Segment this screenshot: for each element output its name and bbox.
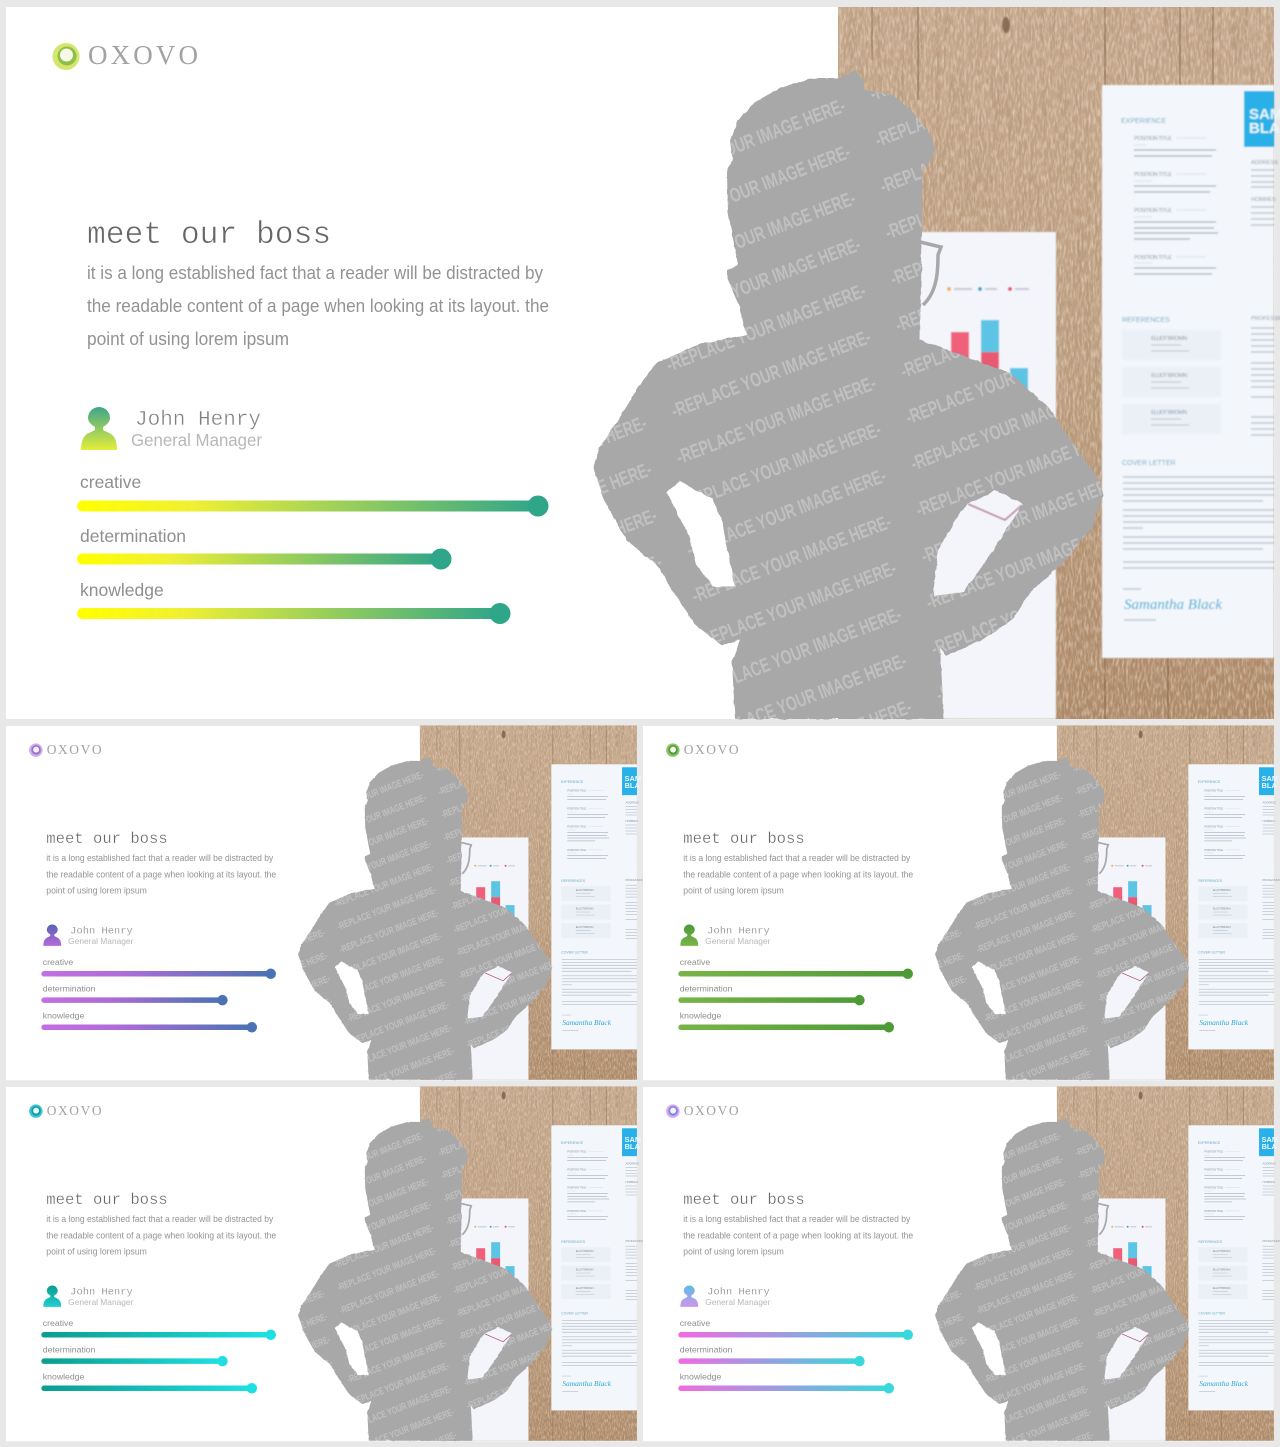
logo: OXOVO (47, 742, 102, 757)
skill bar: creative (678, 1318, 913, 1340)
name and role (705, 925, 770, 946)
text block: description: it is a long established fact that a reader will be distracted by (683, 1214, 911, 1224)
name and role: General Manager (131, 430, 262, 450)
title: meet our boss (683, 1191, 805, 1209)
text block: description: point of using lorem ipsum (87, 329, 289, 349)
icon: person (43, 925, 61, 946)
photo: wood wall, papers and silhouette (794, 725, 1280, 1153)
icon: person (81, 407, 117, 450)
panel: small slide purple-blue theme (6, 725, 647, 1153)
panel: small slide green theme (643, 725, 1280, 1153)
skill bar: determination: determination (680, 984, 733, 994)
text block: description: the readable content of a page when looking at its layout. the (46, 1230, 276, 1240)
name and role (705, 1286, 770, 1307)
name and role: John Henry (70, 925, 133, 937)
text block: description: the readable content of a page when looking at its layout. the (87, 296, 549, 316)
panel: small slide pink-cyan theme (643, 1086, 1280, 1447)
skill bar: creative: creative (680, 1318, 710, 1328)
photo: wood wall, papers and silhouette (157, 725, 647, 1153)
text block: description: the readable content of a page when looking at its layout. the (683, 869, 913, 879)
skill bar: knowledge: knowledge (680, 1011, 722, 1021)
photo: wood wall, papers and replaceable silhouette (309, 7, 1280, 866)
skill bar: knowledge: knowledge (80, 580, 164, 600)
skill bar: determination (77, 526, 452, 570)
photo: wood wall, papers and silhouette (157, 1086, 647, 1447)
name and role: John Henry (707, 1286, 770, 1298)
title: meet our boss (46, 830, 168, 848)
skill bar: determination: determination (680, 1345, 733, 1355)
skill bar: knowledge: knowledge (680, 1372, 722, 1382)
name and role (68, 925, 133, 946)
text block: description: point of using lorem ipsum (683, 1247, 784, 1257)
skill bar: determination (678, 984, 865, 1005)
text block: description: it is a long established fact that a reader will be distracted by (46, 853, 274, 863)
name and role: General Manager (705, 1297, 770, 1307)
skill bar: creative: creative (80, 472, 141, 492)
logo: OXOVO (47, 1103, 102, 1118)
skill bar: knowledge (77, 580, 510, 624)
panel: small slide teal theme (6, 1086, 647, 1447)
text block: description (683, 1214, 913, 1257)
icon: person (680, 1286, 698, 1307)
title: meet our boss (87, 218, 331, 253)
photo: wood wall, papers and silhouette (794, 1086, 1280, 1447)
text block: description: it is a long established fact that a reader will be distracted by (87, 263, 543, 283)
skill bar: creative (678, 957, 913, 979)
skill bar: determination: determination (43, 1345, 96, 1355)
skill bar: creative: creative (680, 957, 710, 967)
skill bar: creative (41, 1318, 276, 1340)
title: meet our boss (46, 1191, 168, 1209)
name and role: General Manager (68, 936, 133, 946)
skill bar: determination: determination (80, 526, 186, 546)
skill bar: creative (77, 472, 548, 516)
text block: description: point of using lorem ipsum (683, 886, 784, 896)
skill bar: creative: creative (43, 957, 73, 967)
name and role: General Manager (705, 936, 770, 946)
text block: description: it is a long established fact that a reader will be distracted by (683, 853, 911, 863)
icon: person (680, 925, 698, 946)
skill bar: creative: creative (43, 1318, 73, 1328)
logo: OXOVO (88, 40, 198, 70)
skill bar: knowledge (678, 1372, 894, 1394)
title: meet our boss (683, 830, 805, 848)
name and role (68, 1286, 133, 1307)
skill bar: determination (41, 984, 228, 1005)
name and role (131, 409, 262, 450)
name and role: John Henry (70, 1286, 133, 1298)
text block: description: point of using lorem ipsum (46, 886, 147, 896)
text block: description: it is a long established fact that a reader will be distracted by (46, 1214, 274, 1224)
text block: description (46, 1214, 276, 1257)
skill bar: knowledge: knowledge (43, 1011, 85, 1021)
name and role: General Manager (68, 1297, 133, 1307)
logo: OXOVO (684, 1103, 739, 1118)
skill bar: determination: determination (43, 984, 96, 994)
skill bar: creative (41, 957, 276, 979)
skill bar: knowledge: knowledge (43, 1372, 85, 1382)
text block: description (87, 263, 549, 349)
skill bar: knowledge (678, 1011, 894, 1033)
name and role: John Henry (707, 925, 770, 937)
text block: description: the readable content of a page when looking at its layout. the (683, 1230, 913, 1240)
skill bar: knowledge (41, 1011, 257, 1033)
skill bar: determination (41, 1345, 228, 1366)
text block: description (46, 853, 276, 896)
name and role: John Henry (135, 409, 261, 432)
skill bar: determination (678, 1345, 865, 1366)
logo: OXOVO (684, 742, 739, 757)
text block: description: point of using lorem ipsum (46, 1247, 147, 1257)
skill bar: knowledge (41, 1372, 257, 1394)
text block: description (683, 853, 913, 896)
text block: description: the readable content of a page when looking at its layout. the (46, 869, 276, 879)
panel: main slide (yellow-green theme) (6, 7, 1280, 866)
icon: person (43, 1286, 61, 1307)
